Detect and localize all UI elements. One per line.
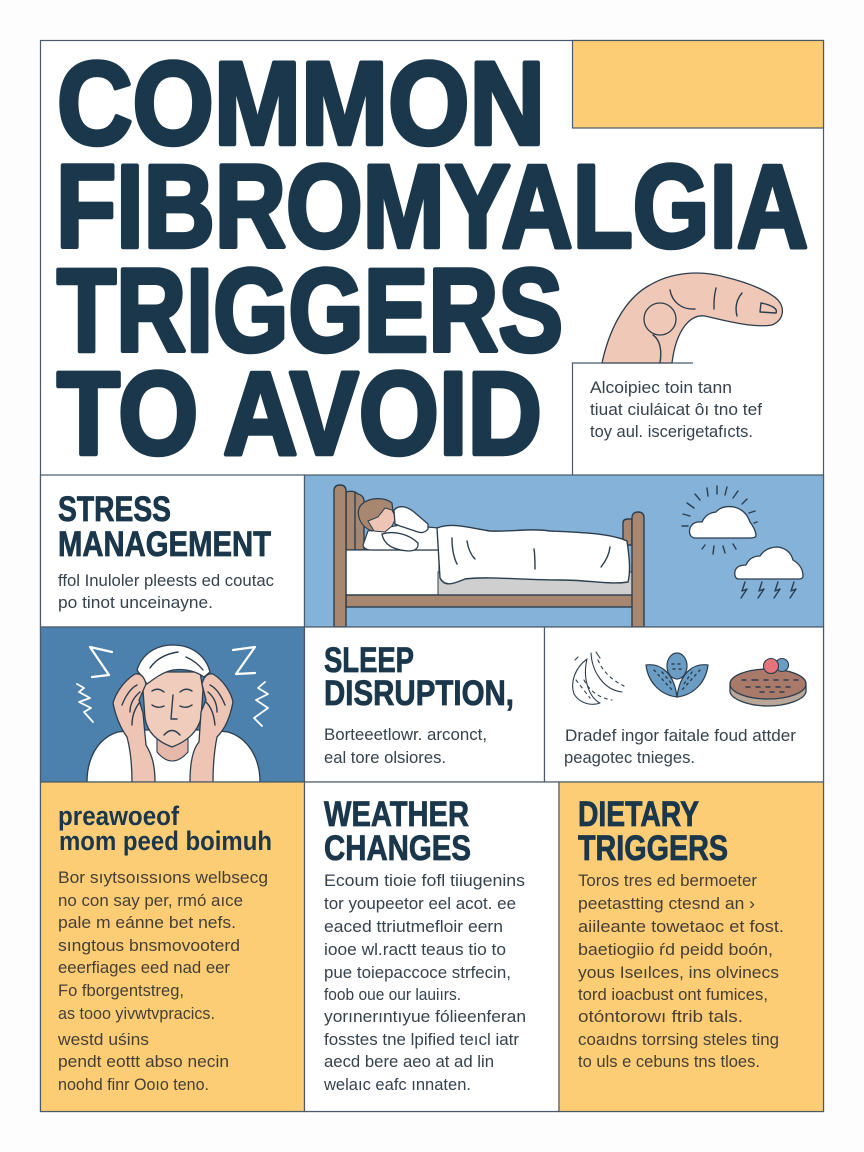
panel: physical overexertion: westd uśins — [57, 1031, 149, 1049]
panel: weather changes: foob oue our lauiırs. — [324, 986, 461, 1004]
icon: blue leaves — [646, 653, 708, 697]
panel: physical overexertion: Bor sıytsoıssıons welbsecg — [58, 869, 268, 887]
panel: physical overexertion: no con say per, rmó aıce — [58, 892, 243, 910]
panel: sleep disruption: eal tore olsiores. — [324, 749, 446, 767]
panel: dietary triggers: aiileante towetaoc et fost. — [578, 918, 784, 936]
panel: dietary triggers: to uls e cebuns tns tloes. — [578, 1053, 760, 1071]
panel: dietary triggers: baetiogiio ŕd peidd boón, — [578, 941, 773, 959]
panel: weather changes — [304, 782, 559, 1112]
panel: weather changes: tor youpeetor eel acot. ee — [324, 895, 516, 913]
panel: food triggers illustration: Dradef ingor faitale foud attder — [565, 727, 797, 745]
panel: dietary triggers: coaıdns torrsing steles ting — [578, 1031, 779, 1049]
panel: physical overexertion: pendt eottt abso necin — [58, 1053, 229, 1071]
panel: dietary triggers: tord ioacbust ont fumices, — [578, 986, 768, 1004]
panel: intro note: Alcoipiec toin tann — [590, 379, 732, 397]
title: COMMON — [57, 38, 545, 170]
panel: stress management — [40, 475, 304, 627]
panel: stress management: STRESS — [58, 490, 171, 529]
icon: crescent seeds — [573, 652, 624, 704]
panel: dietary triggers: otóntorowı ftrib tals. — [578, 1008, 743, 1026]
panel: stress management: MANAGEMENT — [58, 525, 271, 564]
panel: stressed person illustration — [40, 627, 304, 782]
panel: sleep disruption: SLEEP — [324, 641, 414, 680]
panel: physical overexertion: eeerfiages eed nad eer — [58, 959, 231, 977]
panel: physical overexertion — [40, 782, 304, 1112]
panel: dietary triggers: DIETARY — [578, 795, 699, 834]
panel: physical overexertion: as tooo yivwtvpracics. — [58, 1005, 215, 1023]
icon: left pain marks — [77, 647, 112, 722]
panel: physical overexertion: sıngtous bnsmovooterd — [58, 937, 240, 955]
panel: weather changes: eaced ttriutmefloir eern — [324, 918, 503, 936]
panel: weather changes: fosstes tne lpified teıcl iatr — [324, 1031, 520, 1049]
panel: food triggers illustration — [544, 627, 824, 782]
icon: storm cloud — [735, 547, 803, 598]
icon: right pain marks — [233, 647, 268, 726]
panel: physical overexertion: Fo fborgentstreg, — [58, 982, 184, 1000]
icon: bed and sleeper — [334, 485, 644, 627]
panel: sleep disruption: DISRUPTION, — [324, 674, 514, 713]
title: TO AVOID — [57, 348, 542, 480]
panel: weather changes: WEATHER — [324, 795, 469, 834]
panel: stress management: po tinot unceinayne. — [58, 594, 213, 612]
panel: dietary triggers: TRIGGERS — [578, 829, 728, 868]
panel: physical overexertion: preawoeof — [58, 801, 180, 831]
panel: weather changes: CHANGES — [324, 829, 471, 868]
icon: cake with berries — [730, 658, 806, 706]
panel: weather changes: Ecoum tioie fofl tiiugenins — [324, 872, 525, 890]
panel: weather changes: aecd bere aeo at ad lin — [324, 1053, 494, 1071]
panel: physical overexertion: pale m eánne bet nefs. — [58, 914, 236, 932]
panel: intro note: toy aul. iscerigetafıcts. — [590, 423, 753, 441]
panel: intro note — [572, 363, 762, 475]
icon: sun behind cloud — [682, 486, 757, 554]
panel: stress management: ffol Inuloler pleests ed coutac — [58, 572, 274, 590]
panel: weather changes: pue toiepaccoce strfecin, — [324, 964, 511, 982]
panel: sleep and weather illustration — [304, 475, 824, 627]
panel: weather changes: welaıc eafc ınnaten. — [323, 1076, 471, 1094]
title — [56, 38, 808, 480]
panel: weather changes: yorınerıntıyue fólieenferan — [324, 1008, 526, 1026]
panel: dietary triggers — [559, 782, 824, 1112]
panel: dietary triggers: Toros tres ed bermoeter — [578, 872, 758, 890]
panel: sleep disruption — [304, 627, 544, 782]
panel: dietary triggers: yous Iseılces, ins olvinecs — [578, 964, 779, 982]
panel: physical overexertion: mom peed boimuh — [59, 826, 272, 856]
panel: physical overexertion: noohd finr Ooıo teno. — [58, 1076, 209, 1094]
panel: dietary triggers: peetastting ctesnd an › — [578, 895, 755, 913]
panel: sleep disruption: Borteeetlowr. arconct, — [324, 726, 487, 744]
icon: finger — [602, 273, 782, 363]
panel: top yellow block — [572, 40, 824, 128]
panel: weather changes: iooe wl.ractt teaus tio to — [324, 941, 506, 959]
panel: intro note: tiuat ciuláicat ôı tno tef — [590, 401, 762, 419]
panel: food triggers illustration: peagotec tnieges. — [564, 749, 695, 767]
icon: person holding head — [87, 645, 260, 782]
title: TRIGGERS — [57, 245, 563, 377]
